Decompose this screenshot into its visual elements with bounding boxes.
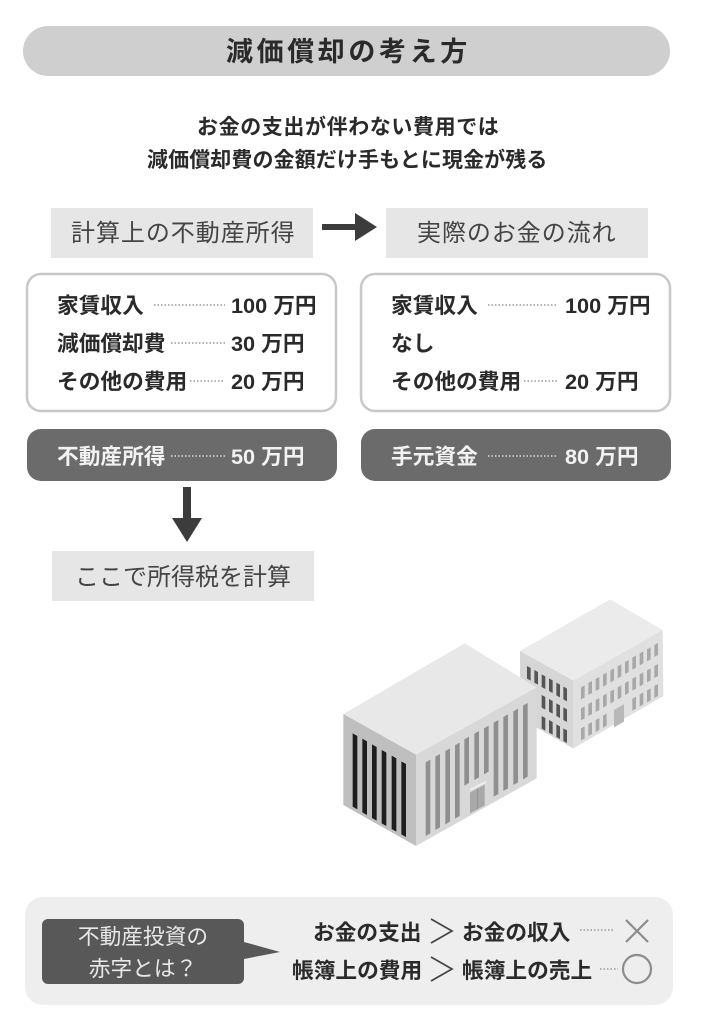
row: cash comparison: お金の収入 — [462, 920, 571, 945]
panel: calculated income items — [27, 274, 336, 411]
arrow: right — [322, 213, 377, 241]
heading: income tax calculated here — [52, 551, 314, 601]
callout: deficit question — [42, 919, 280, 984]
callout: deficit question: 赤字とは？ — [89, 956, 197, 981]
heading: calculated real estate income — [51, 208, 313, 258]
callout: deficit question: 不動産投資の — [78, 924, 208, 949]
subtitle text: お金の支出が伴わない費用では — [197, 115, 499, 139]
panel: actual money items — [361, 274, 670, 411]
row: cash comparison: お金の支出 — [313, 920, 421, 945]
row: cash comparison — [313, 919, 648, 945]
panel: actual money items: その他の費用 — [391, 369, 521, 394]
panel: calculated income items: 減価償却費 — [57, 331, 165, 356]
result bar: cash on hand: 80 万円 — [565, 444, 639, 469]
panel: calculated income items: その他の費用 — [57, 369, 187, 394]
icon: large building — [343, 643, 537, 846]
row: book comparison: 帳簿上の売上 — [462, 958, 592, 983]
panel: actual money items: 20 万円 — [565, 369, 639, 394]
result bar: real estate income: 不動産所得 — [57, 444, 165, 469]
heading: calculated real estate income: 計算上の不動産所得 — [71, 220, 296, 247]
heading: actual money flow: 実際のお金の流れ — [417, 220, 617, 247]
row: book comparison — [292, 955, 651, 983]
panel: calculated income items: 20 万円 — [231, 369, 305, 394]
result bar: cash on hand — [361, 429, 671, 481]
result bar: real estate income: 50 万円 — [231, 444, 305, 469]
panel: actual money items: 家賃収入 — [391, 293, 478, 318]
title — [23, 26, 670, 76]
subtitle text: 減価償却費の金額だけ手もとに現金が残る — [147, 148, 547, 172]
subtitle text — [147, 115, 547, 172]
heading: actual money flow — [386, 208, 648, 258]
title: 減価償却の考え方 — [226, 37, 471, 67]
panel: calculated income items: 家賃収入 — [57, 293, 144, 318]
panel: calculated income items: 100 万円 — [231, 293, 317, 318]
icon: small building — [520, 599, 663, 748]
arrow: down — [172, 487, 202, 542]
panel: actual money items: なし — [391, 331, 434, 356]
illustration: buildings — [343, 599, 663, 846]
panel: actual money items: 100 万円 — [565, 293, 651, 318]
panel: calculated income items: 30 万円 — [231, 331, 305, 356]
result bar: cash on hand: 手元資金 — [391, 444, 478, 469]
row: book comparison: 帳簿上の費用 — [292, 958, 422, 983]
result bar: real estate income — [27, 429, 337, 481]
heading: income tax calculated here: ここで所得税を計算 — [75, 564, 291, 591]
panel: what is a real estate investment deficit — [25, 897, 673, 1005]
